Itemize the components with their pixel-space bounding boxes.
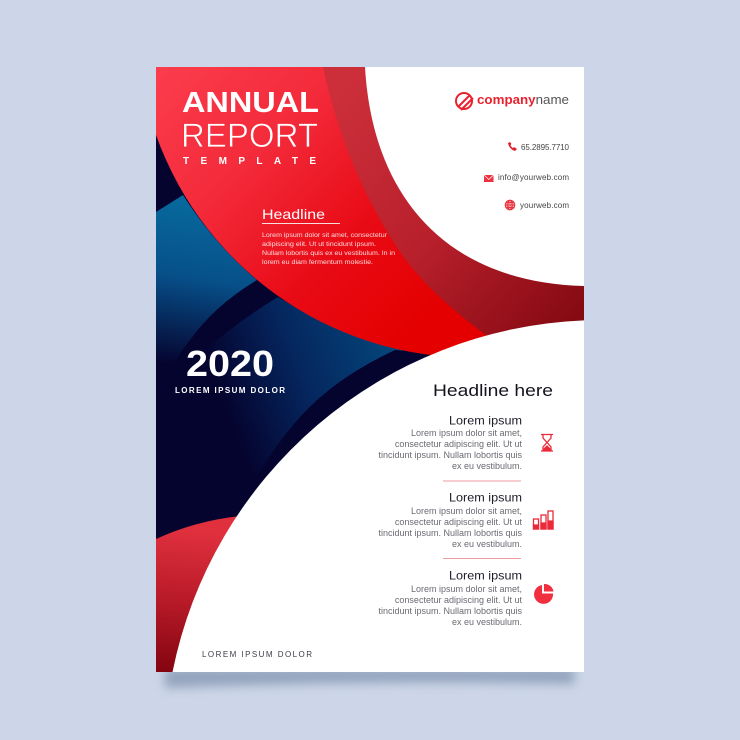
white bottom panel [172, 320, 584, 672]
red panel headline block [262, 206, 395, 266]
item 1: tincidunt ipsum. Nullam lobortis quis [378, 450, 522, 460]
year block: 2020 [186, 343, 274, 384]
item 1: Lorem ipsum [449, 414, 522, 428]
item 2: consectetur adipiscing elit. Ut ut [395, 517, 522, 527]
item 2: Lorem ipsum dolor sit amet, [411, 506, 522, 516]
year block [175, 343, 285, 395]
red panel headline block: Lorem ipsum dolor sit amet, consectetur [262, 232, 388, 239]
item 3: consectetur adipiscing elit. Ut ut [395, 595, 522, 605]
panel heading: Headline here [433, 381, 553, 400]
phone number: 65.2895.7710 [521, 143, 570, 152]
item 3: Lorem ipsum [449, 568, 522, 582]
bright red circle [156, 67, 490, 358]
year block: LOREM IPSUM DOLOR [175, 386, 285, 395]
blue shape: upper left [156, 195, 257, 357]
item 2: ex eu vestibulum. [452, 539, 522, 549]
blue shape: centre [216, 297, 406, 464]
item 1: consectetur adipiscing elit. Ut ut [395, 439, 522, 449]
icon: company logo [456, 93, 473, 110]
icon: bar chart [534, 511, 553, 529]
white top-right corner [365, 67, 584, 286]
item 1: Lorem ipsum dolor sit amet, [411, 428, 522, 438]
red panel headline block: lorem eu diam fermentum molestie. [262, 259, 373, 266]
item 1 [378, 414, 522, 471]
icon: mail [484, 175, 494, 182]
icon: pie chart [534, 584, 554, 604]
page drop shadow [165, 668, 575, 688]
red panel headline block: Headline [262, 206, 325, 222]
title: REPORT [181, 117, 318, 155]
footer text: LOREM IPSUM DOLOR [202, 650, 312, 659]
item 1: ex eu vestibulum. [452, 461, 522, 471]
title: TEMPLATE [183, 156, 316, 167]
red panel headline block: adipiscing elit. Ut ut tincidunt ipsum. [262, 241, 376, 248]
item 3 [378, 568, 522, 627]
item 3: Lorem ipsum dolor sit amet, [411, 584, 522, 594]
icon: hourglass [541, 434, 553, 451]
poster page [156, 67, 584, 672]
email: info@yourweb.com [498, 173, 569, 182]
dark red band [323, 67, 584, 336]
item 2 [378, 490, 522, 549]
title: ANNUAL [182, 87, 319, 119]
red lower-left shape [156, 516, 240, 672]
company name: companyname [477, 92, 569, 107]
item 3: tincidunt ipsum. Nullam lobortis quis [378, 606, 522, 616]
red panel headline block: Nullam lobortis quis ex eu vestibulum. In in [262, 250, 395, 257]
item 2: Lorem ipsum [449, 490, 522, 504]
title [181, 87, 319, 167]
icon: globe [505, 200, 515, 210]
item 2: tincidunt ipsum. Nullam lobortis quis [378, 528, 522, 538]
website: yourweb.com [520, 201, 569, 210]
icon: phone [508, 142, 517, 151]
item 3: ex eu vestibulum. [452, 617, 522, 627]
